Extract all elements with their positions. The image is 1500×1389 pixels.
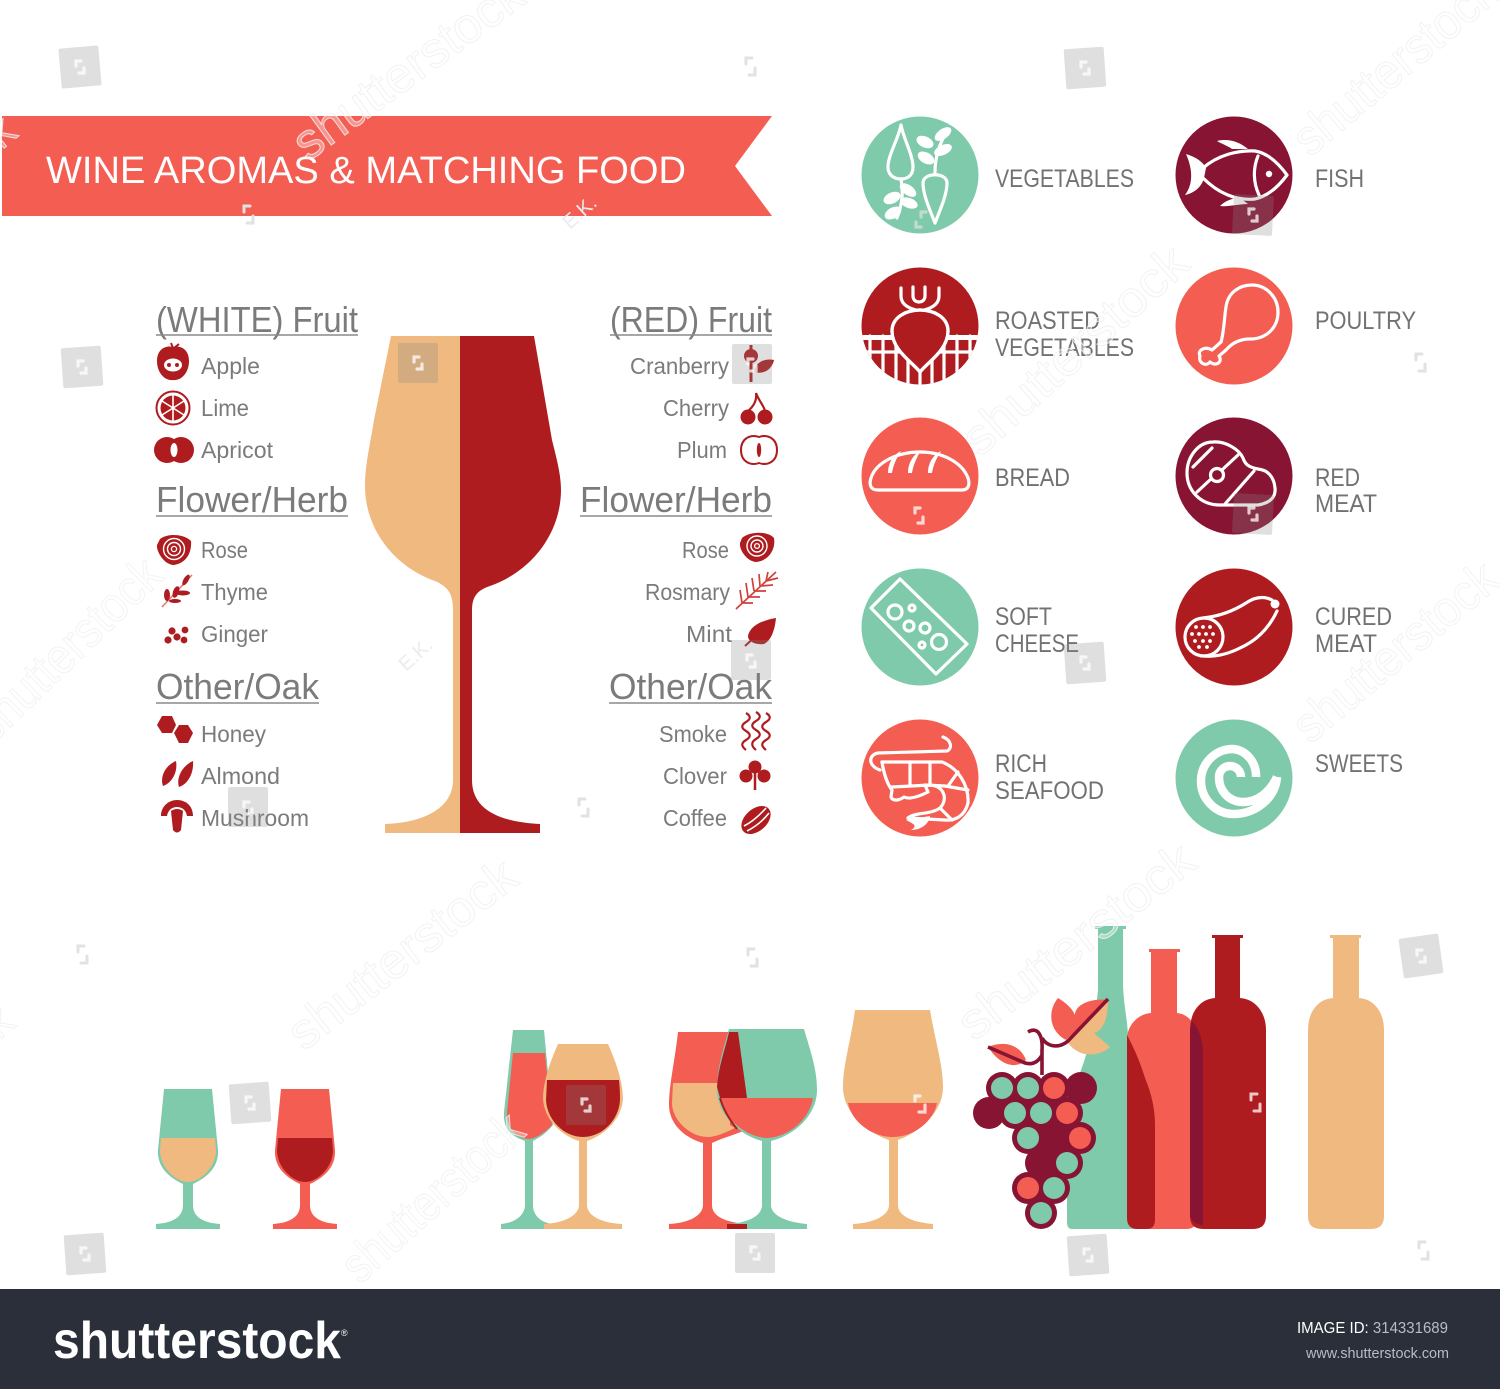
item: cherry: Cherry [663,395,729,421]
food: vegetables [862,116,978,234]
item: cranberry: Cranberry [630,353,729,379]
item: thyme [162,574,268,607]
item: honey [157,716,266,747]
heading: white flower herb: Flower/Herb [156,479,348,520]
heading: red flower herb: Flower/Herb [580,479,772,520]
watermark overlay: shutterstock [330,1100,535,1293]
watermark overlay: shutterstock [950,233,1200,466]
item: mushroom: Mushroom [201,805,309,831]
food: poultry [1176,268,1292,384]
label: cured meat [1315,603,1392,658]
wine glass mint [717,1029,817,1229]
item: clover [663,760,770,790]
small coral glass [273,1089,337,1229]
label: sweets: SWEETS [1315,750,1403,778]
item: ginger: Ginger [201,621,268,647]
label: poultry: POULTRY [1315,307,1416,335]
grape bunch with leaves [973,998,1110,1229]
title banner: WINE AROMAS & MATCHING FOOD [46,150,686,192]
food: bread [862,418,978,534]
watermark overlay: shutterstock [276,847,528,1061]
footer url: www.shutterstock.com [1305,1346,1449,1362]
food: cured meat [1176,568,1292,686]
bottle mint [1067,926,1136,1229]
central wine glass half white half red [365,336,561,833]
label: rich seafood [995,750,1104,805]
title banner [2,116,772,216]
item: rosmary: Rosmary [645,579,730,605]
label: rich seafood: SEAFOOD [995,777,1104,805]
item: rose right: Rose [682,537,729,563]
label: soft cheese: SOFT [995,603,1052,631]
label: roasted vegetables [995,307,1134,362]
bottle coral [1127,949,1197,1229]
item: coffee [663,800,776,840]
footer bar [0,1289,1500,1389]
item: rose right [682,533,774,563]
label: roasted vegetables: VEGETABLES [995,334,1134,362]
watermark overlay: E.K. [395,634,437,676]
watermark overlay: E.K. [559,192,601,234]
label: rich seafood: RICH [995,750,1047,778]
label: vegetables: VEGETABLES [995,165,1134,193]
food: fish [1176,116,1292,234]
label: roasted vegetables: ROASTED [995,307,1100,335]
food: sweets [1176,720,1292,836]
heading: white fruit: (WHITE) Fruit [156,299,358,340]
item: cherry [663,393,772,424]
item: mushroom [161,800,309,832]
item: honey: Honey [201,721,266,747]
label: red meat: MEAT [1315,490,1377,518]
watermark overlay: shutterstock [946,830,1206,1051]
food: rich seafood [862,720,978,836]
food: soft cheese [862,568,978,686]
item: coffee: Coffee [663,805,727,831]
item: apple: Apple [201,353,260,379]
item: ginger [164,621,268,647]
balloon glass peach [543,1044,623,1229]
footer logo mark: ® [341,1328,348,1338]
bottle peach [1308,935,1384,1229]
item: rose: Rose [201,537,248,563]
item: mint: Mint [686,621,733,647]
item: plum [677,436,777,464]
food: red meat [1176,418,1292,534]
food: roasted vegetables [861,268,979,385]
item: rose [157,535,248,565]
heading: white other oak: Other/Oak [156,666,320,707]
flute glass mint [501,1030,553,1229]
item: mint [686,618,776,647]
item: almond: Almond [201,763,280,789]
label: cured meat: CURED [1315,603,1392,631]
item: thyme: Thyme [201,579,268,605]
item: apple [157,343,260,380]
item: lime [156,392,249,424]
item: apricot: Apricot [201,437,274,463]
label: cured meat: MEAT [1315,630,1377,658]
label: red meat [1315,464,1377,518]
heading: red other oak: Other/Oak [609,666,773,707]
small mint glass [156,1089,220,1229]
item: rosmary [645,572,778,609]
item: almond [162,761,280,789]
wine glass peach [843,1010,943,1229]
bottle red [1190,935,1266,1229]
label: red meat: RED [1315,464,1360,492]
footer logo: shutterstock [53,1312,341,1370]
item: apricot [154,437,274,463]
footer image id: IMAGE ID: 314331689 [1297,1320,1448,1337]
wine glass coral [669,1032,750,1229]
item: lime: Lime [201,395,249,421]
item: plum: Plum [677,437,727,463]
label: fish: FISH [1315,165,1364,193]
item: clover: Clover [663,763,727,789]
heading: red fruit: (RED) Fruit [610,299,772,340]
label: soft cheese: CHEESE [995,630,1079,658]
item: smoke: Smoke [659,721,727,747]
item: cranberry [630,345,774,382]
item: smoke [659,712,770,750]
label: soft cheese [995,603,1079,658]
label: bread: BREAD [995,464,1070,492]
